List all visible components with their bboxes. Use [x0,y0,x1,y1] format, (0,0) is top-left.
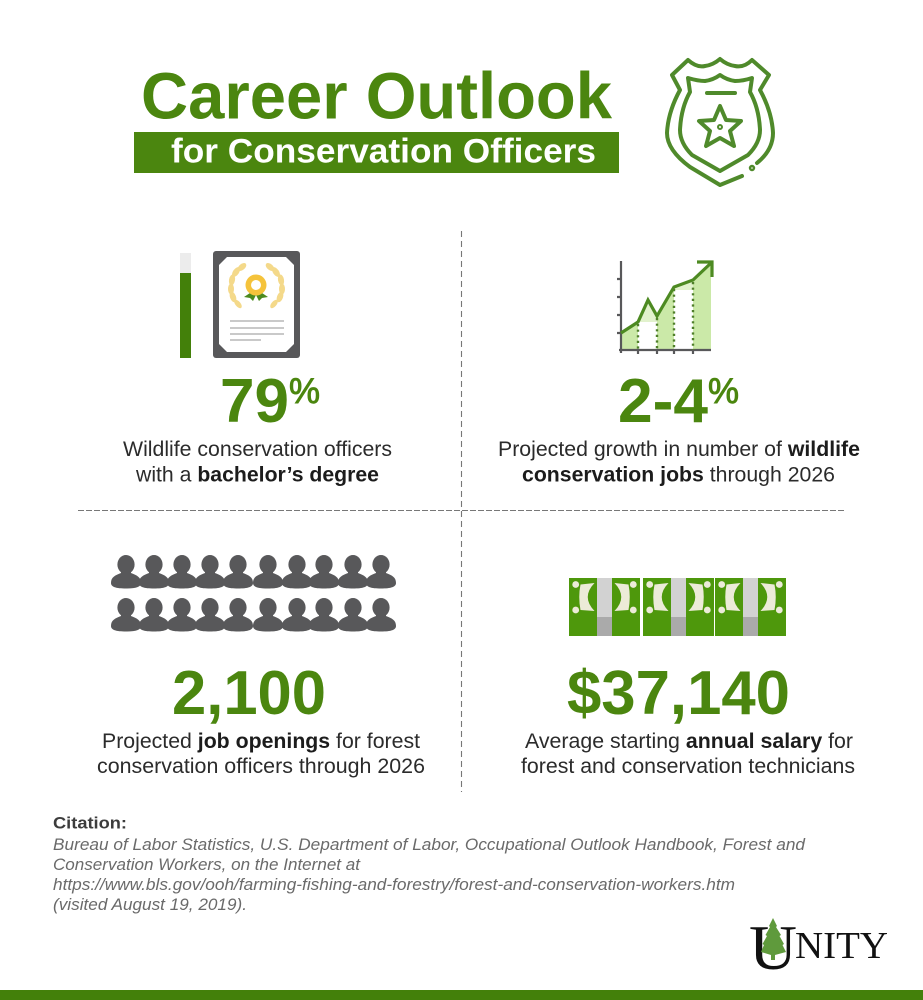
stat: 79%: % [289,372,320,411]
icon: officer badge [667,59,773,185]
stat: 2-4%: 2-4 [618,367,709,436]
stat: 2,100: 2,100 [172,659,326,728]
text: salary description: Average starting annual salary for [525,730,853,753]
panel: salary [521,578,855,778]
stat: $37,140: $37,140 [567,659,790,728]
citation: Citation: [53,814,127,832]
stat: 2-4%: % [708,372,739,411]
citation: Conservation Workers, on the Internet at [53,856,361,874]
icon: dollar bills [569,578,786,636]
icon: progress bar [180,253,191,358]
citation: https://www.bls.gov/ooh/farming-fishing-and-forestry/forest-and-conservation-workers.htm [53,876,735,894]
icon: growth chart [617,261,712,354]
divider: vertical [460,231,462,792]
text: job openings description: Projected job openings for forest [102,730,420,753]
citation [53,814,806,914]
divider: horizontal [78,510,845,512]
icon: rows of people [111,555,396,632]
citation: Bureau of Labor Statistics, U.S. Department of Labor, Occupational Outlook Handbook, Forest and [53,836,806,854]
text: bachelor's degree description [123,438,392,486]
text: bachelor's degree description: with a bachelor’s degree [135,464,379,486]
logo: Unity: U [749,912,797,983]
stat: 79%: 79 [220,367,289,436]
text: salary description [521,730,855,778]
panel: bachelor's degree [123,251,392,486]
icon: diploma [213,251,300,358]
panel: job growth [498,261,860,486]
text: job openings description: conservation officers through 2026 [97,755,425,778]
stat: 79% [220,367,320,436]
panel: job openings [97,555,425,778]
text: job growth description: conservation jobs through 2026 [522,464,835,486]
text: salary description: forest and conservation technicians [521,755,855,778]
text: job openings description [97,730,425,778]
citation: (visited August 19, 2019). [53,896,247,914]
text: job growth description [498,438,860,486]
logo: Unity [749,912,888,983]
subtitle banner: for Conservation Officers [171,132,596,170]
logo: Unity: NITY [795,925,888,967]
title: Career Outlook [141,58,612,132]
text: bachelor's degree description: Wildlife conservation officers [123,438,392,461]
footer bar [0,990,923,1000]
icon: pine tree [761,918,786,960]
text: job growth description: Projected growth in number of wildlife [498,438,860,461]
